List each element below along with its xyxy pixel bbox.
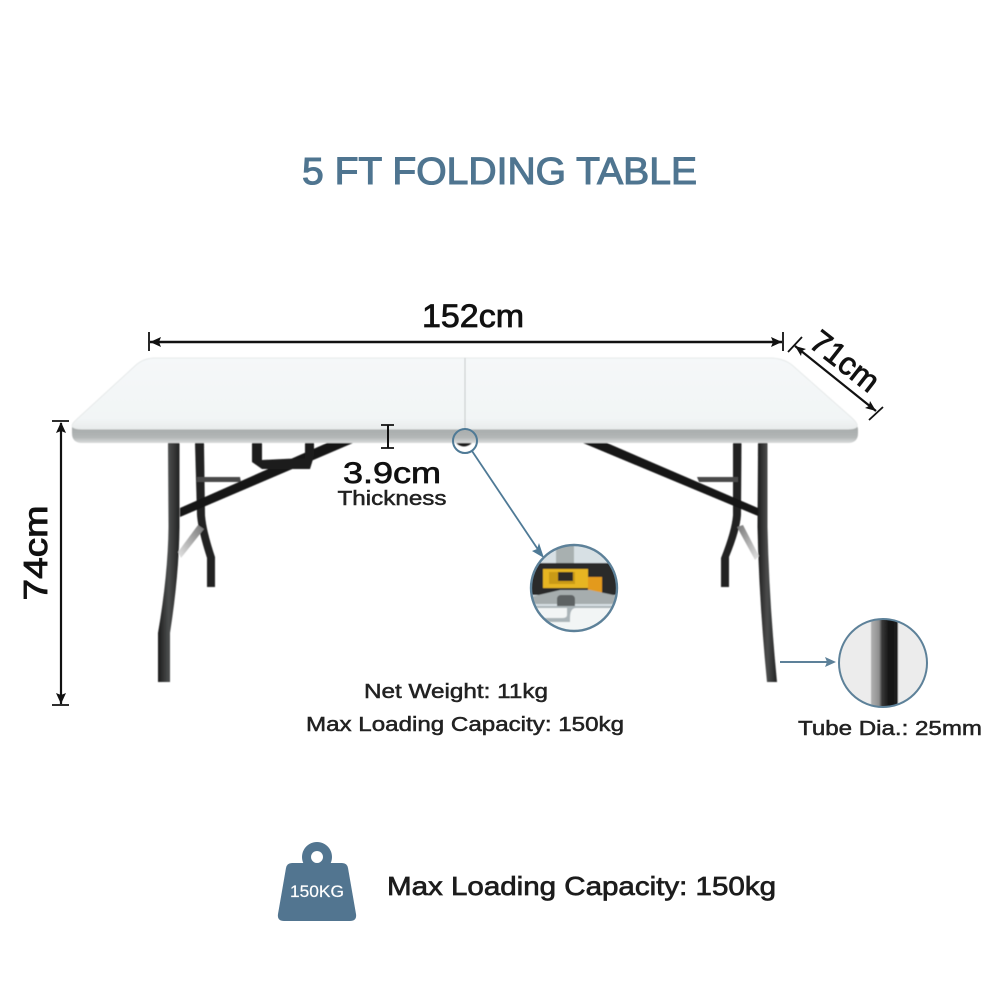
width dimension: 152cm bbox=[149, 298, 783, 351]
depth dimension: 71cm: 71cm bbox=[803, 323, 887, 399]
folding table illustration bbox=[72, 358, 858, 682]
max loading capacity label: Max Loading Capacity: 150kg bbox=[306, 714, 624, 736]
centre seam bbox=[464, 358, 466, 430]
height dimension: 74cm bbox=[17, 421, 69, 705]
title: 5 FT FOLDING TABLE bbox=[302, 151, 697, 193]
right table legs bbox=[583, 443, 777, 682]
hinge callout pointer bbox=[453, 429, 544, 558]
tube callout arrow bbox=[780, 657, 836, 667]
thickness dimension: 3.9cm: 3.9cm bbox=[343, 457, 441, 490]
table top bbox=[72, 358, 857, 429]
table edge bbox=[72, 424, 858, 443]
tube detail circle bbox=[838, 618, 928, 708]
tube diameter label: Tube Dia.: 25mm bbox=[798, 718, 982, 740]
thickness dimension: 3.9cm: Thickness bbox=[338, 488, 446, 510]
hinge latch bbox=[456, 443, 472, 446]
left table legs bbox=[158, 443, 353, 682]
icon: 150kg weight: 150KG bbox=[290, 882, 344, 901]
depth dimension: 71cm bbox=[788, 323, 887, 420]
height dimension: 74cm: 74cm bbox=[17, 506, 54, 600]
bottom capacity statement: Max Loading Capacity: 150kg bbox=[387, 871, 776, 901]
hinge detail circle bbox=[530, 544, 618, 632]
icon: 150kg weight bbox=[278, 842, 356, 921]
thickness dimension: 3.9cm bbox=[338, 425, 446, 510]
net weight label: Net Weight: 11kg bbox=[364, 681, 548, 703]
width dimension: 152cm: 152cm bbox=[422, 298, 524, 334]
